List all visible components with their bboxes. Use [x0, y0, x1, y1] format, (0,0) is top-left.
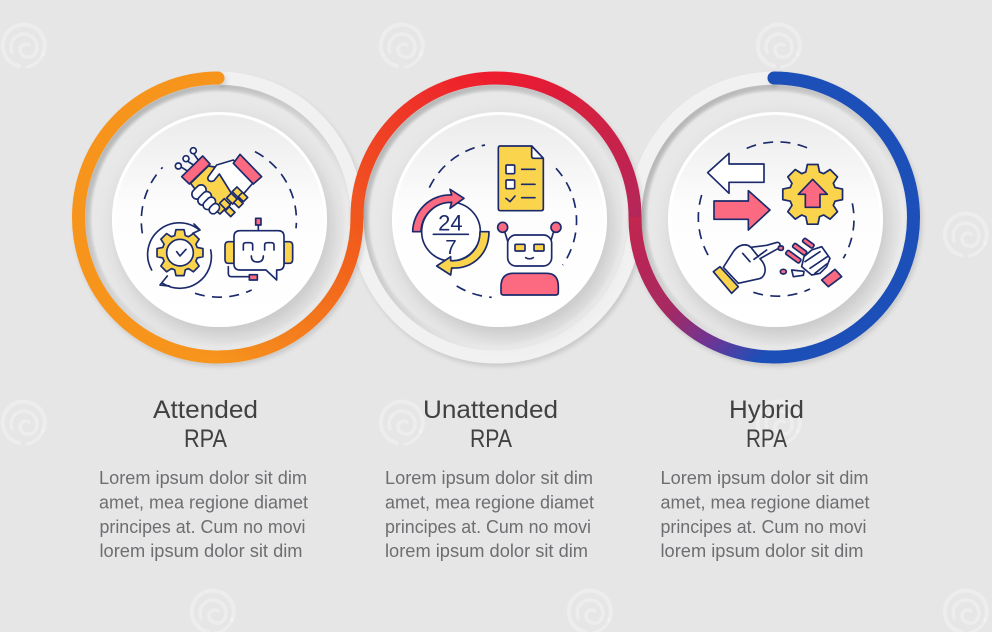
continuous coloured gradient ribbon [78, 78, 914, 357]
text block: Hybrid RPA description: amet, mea regione diamet [660, 492, 870, 512]
icon: 24/7 cycle: 24 [438, 211, 463, 236]
recessed inner circles [88, 88, 904, 348]
text block: Unattended RPA description: Lorem ipsum dolor sit dim [385, 468, 593, 488]
icon group: unattended RPA [413, 145, 577, 297]
icon: robot hand [780, 238, 842, 287]
icon: 24/7 cycle: 7 [445, 236, 457, 259]
icon: 24/7 cycle [413, 189, 489, 275]
heading: Hybrid RPA: RPA [746, 425, 787, 453]
white disc: unattended [394, 114, 606, 326]
icon: digital handshake [175, 148, 262, 217]
heading: Unattended RPA: RPA [470, 425, 512, 453]
heading: Attended RPA: RPA [184, 425, 227, 453]
icon: robot [498, 222, 561, 295]
heading: Unattended RPA [423, 396, 558, 453]
text block: Hybrid RPA description [660, 468, 870, 561]
text block: Attended RPA description: amet, mea regione diamet [99, 492, 308, 512]
icon: chatbot head [225, 218, 293, 280]
icon: gear with clock [148, 223, 211, 288]
heading: Hybrid RPA [729, 396, 804, 453]
heading: Unattended RPA: Unattended [423, 396, 558, 424]
text block: Unattended RPA description: principes at. Cum no movi [385, 517, 591, 537]
text block: Attended RPA description: Lorem ipsum dolor sit dim [99, 468, 307, 488]
icon group: hybrid RPA [698, 142, 854, 296]
text block: Unattended RPA description [385, 468, 594, 561]
icon: left arrow [708, 153, 764, 193]
icon: gear with up arrow [783, 164, 843, 224]
icon: human hand [713, 242, 783, 293]
light track segments [218, 78, 774, 357]
heading: Attended RPA [153, 396, 258, 453]
icon: checklist document [498, 146, 543, 211]
icon: right arrow [714, 191, 770, 230]
heading: Hybrid RPA: Hybrid [729, 396, 804, 424]
white disc: attended [114, 114, 326, 326]
white disc: hybrid [670, 114, 882, 326]
icon group: attended RPA [141, 148, 296, 297]
text block: Unattended RPA description: amet, mea regione diamet [385, 492, 594, 512]
text block: Hybrid RPA description: lorem ipsum dolor sit dim [660, 541, 864, 561]
text block: Attended RPA description: principes at. Cum no movi [100, 517, 306, 537]
text block: Hybrid RPA description: principes at. Cum no movi [660, 517, 866, 537]
text block: Attended RPA description: lorem ipsum dolor sit dim [100, 541, 302, 561]
heading: Attended RPA: Attended [153, 396, 258, 424]
text block: Hybrid RPA description: Lorem ipsum dolor sit dim [660, 468, 868, 488]
text block: Attended RPA description [99, 468, 308, 561]
text block: Unattended RPA description: lorem ipsum dolor sit dim [385, 541, 588, 561]
